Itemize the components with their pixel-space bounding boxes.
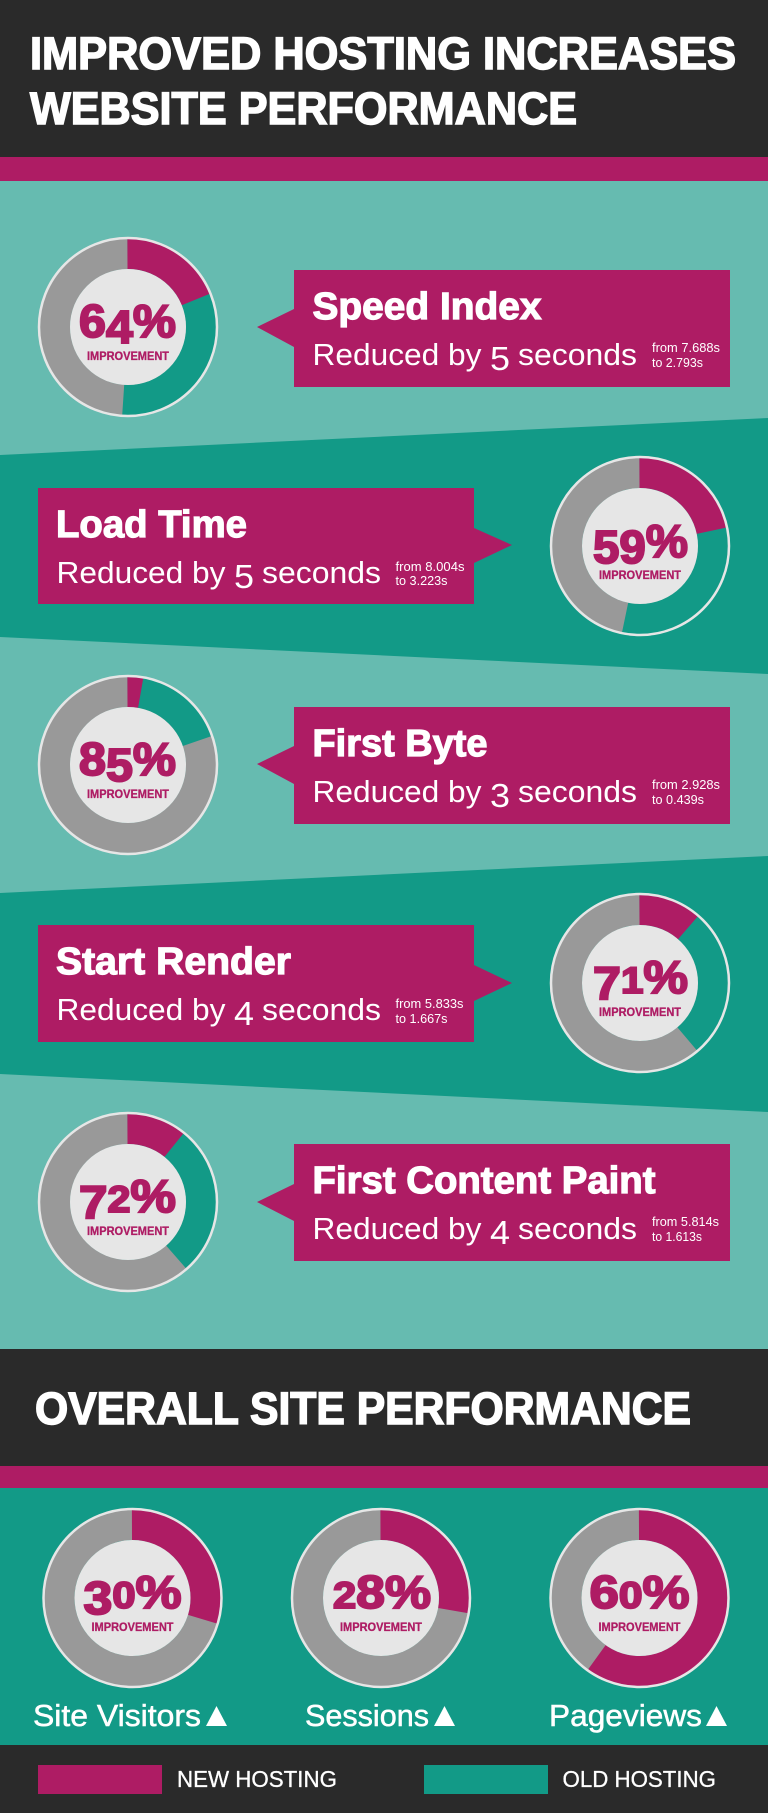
donut: first byte 85% bbox=[39, 676, 217, 854]
callout: speed index: seconds bbox=[518, 337, 637, 372]
donut: first content paint 72%: 7 bbox=[79, 1176, 108, 1228]
title: IMPROVED HOSTING INCREASES bbox=[30, 28, 736, 79]
callout: first content paint: First Content Paint bbox=[312, 1160, 656, 1202]
callout: start render bbox=[38, 925, 512, 1042]
callout: speed index: Reduced by bbox=[312, 337, 482, 372]
callout: load time: from 8.004s bbox=[396, 559, 465, 574]
donut: load time 59%: IMPROVEMENT bbox=[599, 568, 682, 582]
callout: first content paint: 4 bbox=[490, 1214, 510, 1251]
callout: start render: to 1.667s bbox=[396, 1011, 448, 1026]
callout: start render: Start Render bbox=[56, 941, 291, 983]
callout: speed index bbox=[257, 270, 730, 387]
legend: OLD HOSTING bbox=[562, 1766, 716, 1792]
callout: load time: to 3.223s bbox=[396, 573, 448, 588]
callout: speed index: 5 bbox=[490, 340, 510, 377]
donut: start render 71%: 1 bbox=[621, 960, 643, 1001]
donut: site visitors 30%: IMPROVEMENT bbox=[92, 1620, 174, 1634]
callout: first byte: First Byte bbox=[312, 723, 488, 765]
donut: start render 71%: IMPROVEMENT bbox=[599, 1005, 682, 1019]
callout: first content paint bbox=[257, 1144, 730, 1261]
legend: NEW HOSTING bbox=[177, 1766, 337, 1792]
callout: first content paint: seconds bbox=[518, 1211, 637, 1246]
title: WEBSITE PERFORMANCE bbox=[30, 83, 577, 134]
callout: first byte: from 2.928s bbox=[652, 777, 720, 792]
callout: load time bbox=[38, 488, 512, 604]
donut: sessions 28% bbox=[292, 1509, 470, 1687]
callout: load time: 5 bbox=[234, 558, 254, 595]
donut: speed index 64%: 4 bbox=[106, 301, 133, 353]
background: light teal field bbox=[0, 181, 768, 1349]
band: dark teal band 4 bbox=[0, 856, 768, 1112]
title bbox=[30, 28, 736, 134]
donut: start render 71%: 7 bbox=[593, 957, 621, 1009]
callout: first byte: Reduced by bbox=[312, 774, 482, 809]
section header: overall site performance bbox=[0, 1349, 768, 1488]
donut: pageviews 60%: IMPROVEMENT bbox=[598, 1620, 681, 1634]
callout: start render: seconds bbox=[262, 992, 381, 1027]
callout: load time: Load Time bbox=[56, 504, 247, 546]
callout: first byte bbox=[257, 707, 730, 824]
callout: speed index: from 7.688s bbox=[652, 340, 720, 355]
donut: first content paint 72%: 2 bbox=[108, 1179, 130, 1220]
callout: speed index: to 2.793s bbox=[652, 355, 703, 370]
donut: site visitors 30%: 0 bbox=[112, 1575, 135, 1616]
donut: pageviews 60% bbox=[550, 1509, 728, 1687]
donut: first content paint 72% bbox=[39, 1113, 217, 1291]
donut: speed index 64%: % bbox=[133, 295, 176, 347]
callout: start render: Reduced by bbox=[56, 992, 226, 1027]
donut: sessions 28%: IMPROVEMENT bbox=[340, 1620, 423, 1634]
callout: first byte: seconds bbox=[518, 774, 637, 809]
callout: first content paint: from 5.814s bbox=[652, 1214, 719, 1229]
donut: speed index 64%: 6 bbox=[79, 295, 105, 347]
callout: start render: from 5.833s bbox=[396, 996, 464, 1011]
callout: load time: Reduced by bbox=[56, 555, 226, 590]
label: sessions: Sessions bbox=[305, 1698, 429, 1733]
panel: overall results bbox=[0, 1488, 768, 1745]
label: pageviews: Pageviews bbox=[549, 1698, 702, 1733]
donut: first content paint 72%: IMPROVEMENT bbox=[87, 1224, 170, 1238]
callout: first byte: 3 bbox=[490, 777, 510, 814]
donut: first byte 85%: 5 bbox=[106, 739, 133, 791]
donut: first byte 85%: 8 bbox=[79, 733, 105, 785]
donut: site visitors 30%: 3 bbox=[84, 1572, 112, 1624]
donut: load time 59%: 59 bbox=[593, 521, 646, 573]
donut: load time 59%: % bbox=[646, 515, 688, 567]
section header: overall site performance: OVERALL SITE PERFORMANCE bbox=[35, 1383, 691, 1434]
band: dark teal band 2 bbox=[0, 418, 768, 674]
callout: load time: seconds bbox=[262, 555, 381, 590]
donut: pageviews 60%: 60% bbox=[590, 1566, 689, 1618]
donut: first byte 85%: % bbox=[133, 733, 176, 785]
donut: site visitors 30%: % bbox=[135, 1566, 182, 1618]
donut: speed index 64%: IMPROVEMENT bbox=[87, 349, 170, 363]
label: site visitors: Site Visitors bbox=[33, 1698, 201, 1733]
donut: load time 59% bbox=[551, 457, 729, 635]
header panel bbox=[0, 0, 768, 181]
callout: first content paint: to 1.613s bbox=[652, 1229, 702, 1244]
donut: start render 71%: % bbox=[643, 951, 688, 1003]
callout: speed index: Speed Index bbox=[312, 286, 542, 328]
donut: first content paint 72%: % bbox=[130, 1170, 176, 1222]
donut: first byte 85%: IMPROVEMENT bbox=[87, 787, 170, 801]
donut: speed index 64% bbox=[39, 238, 217, 416]
callout: first byte: to 0.439s bbox=[652, 792, 704, 807]
donut: sessions 28%: 28% bbox=[333, 1566, 431, 1618]
callout: start render: 4 bbox=[234, 995, 254, 1032]
callout: first content paint: Reduced by bbox=[312, 1211, 482, 1246]
donut: start render 71% bbox=[551, 894, 729, 1072]
legend bbox=[0, 1745, 768, 1813]
donut: site visitors 30% bbox=[44, 1509, 222, 1687]
